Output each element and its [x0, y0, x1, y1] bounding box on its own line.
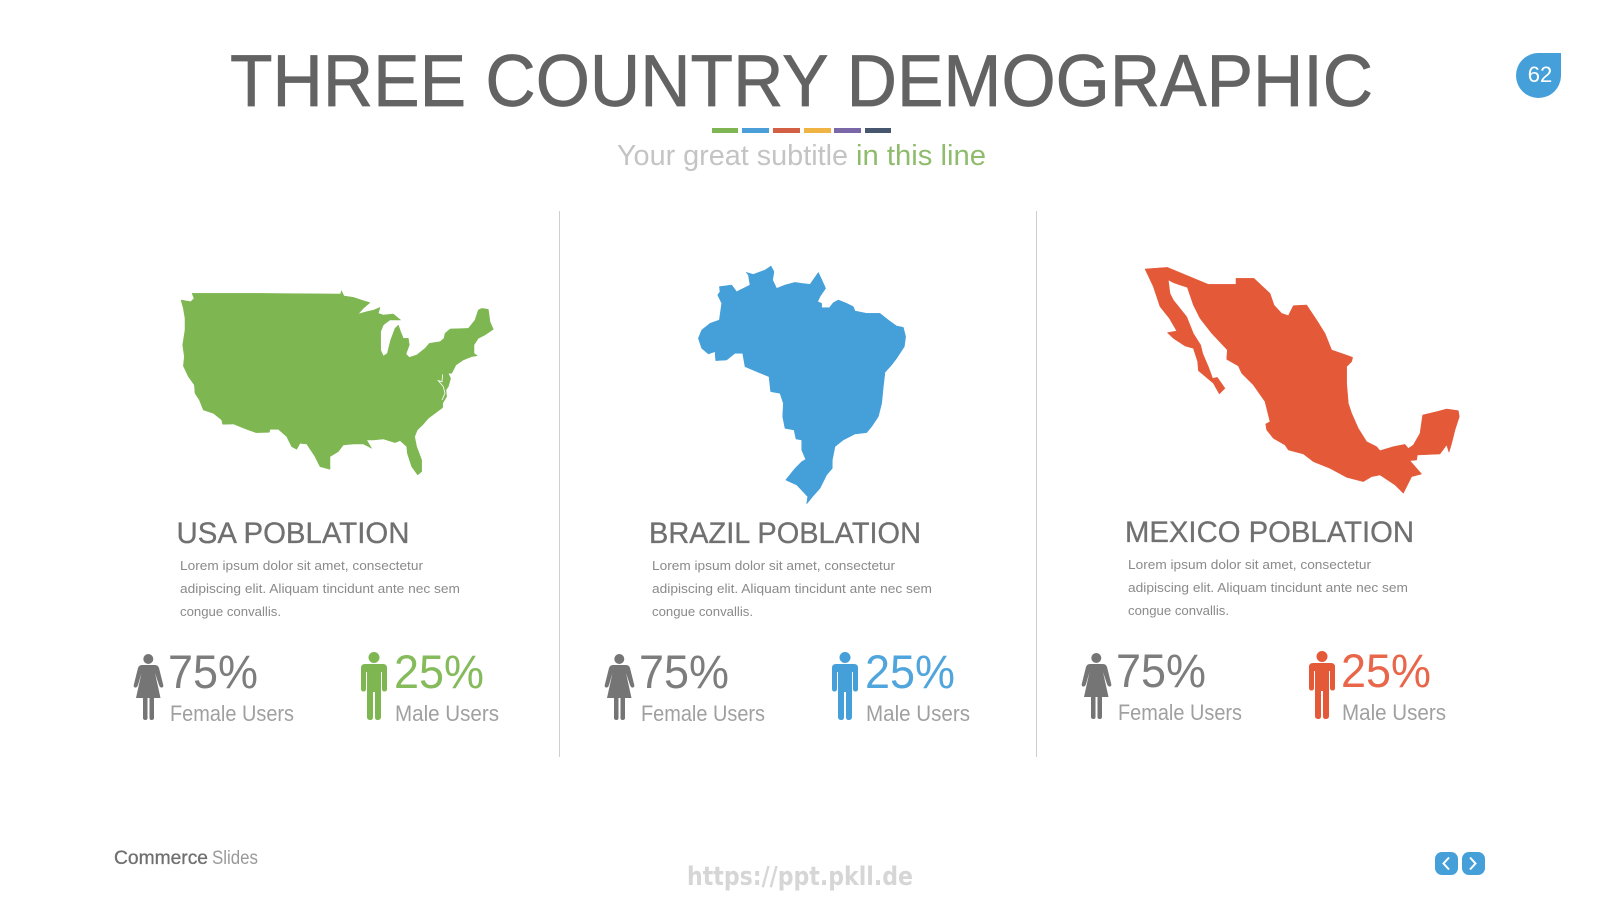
footer brand: Commerce — [114, 848, 208, 869]
body text: Brazil: Lorem ipsum dolor sit amet, consectetur — [652, 558, 896, 573]
icon: next arrow — [1462, 852, 1485, 875]
stat: male users Mexico: Male Users — [1342, 700, 1446, 725]
body text: USA: adipiscing elit. Aliquam tincidunt ante nec sem — [180, 581, 460, 596]
body text: Brazil: congue convallis. — [652, 604, 753, 619]
body text: Brazil: adipiscing elit. Aliquam tincidunt ante nec sem — [652, 581, 932, 596]
stat: female users Brazil — [605, 645, 765, 726]
body text: Brazil — [652, 558, 932, 619]
icon: male — [361, 652, 387, 720]
stat: male users USA — [361, 645, 499, 726]
stat: male users Brazil — [832, 645, 970, 726]
body text: Mexico — [1128, 557, 1408, 618]
stat: male users USA: Male Users — [395, 701, 499, 726]
stat: male users Brazil: Male Users — [866, 701, 970, 726]
title: THREE COUNTRY DEMOGRAPHIC — [230, 41, 1373, 122]
heading: Brazil: BRAZIL POBLATION — [649, 517, 921, 550]
icon: male — [832, 652, 858, 720]
navigation buttons — [1435, 852, 1485, 875]
icon: previous arrow — [1435, 852, 1458, 875]
body text: USA: Lorem ipsum dolor sit amet, consectetur — [180, 558, 424, 573]
stat: female users Brazil: Female Users — [641, 701, 765, 726]
body text: Mexico: congue convallis. — [1128, 603, 1229, 618]
panel: Mexico — [1082, 267, 1459, 725]
colour dash row — [712, 128, 891, 133]
subtitle: Your great subtitle — [617, 140, 848, 172]
stat: female users USA: 75% — [168, 645, 258, 698]
icon: female — [605, 654, 634, 720]
map: Brazil — [698, 266, 906, 504]
panel: Brazil — [605, 266, 970, 726]
heading: Mexico: MEXICO POBLATION — [1125, 516, 1414, 549]
icon: male — [1309, 651, 1335, 719]
stat: male users Brazil: 25% — [865, 645, 955, 698]
stat: male users USA: 25% — [394, 645, 484, 698]
map: USA — [181, 291, 493, 475]
icon: female — [1082, 653, 1111, 719]
page number badge — [1516, 53, 1561, 98]
stat: female users USA — [134, 645, 294, 726]
stat: female users USA: Female Users — [170, 701, 294, 726]
body text: Mexico: adipiscing elit. Aliquam tincidunt ante nec sem — [1128, 580, 1408, 595]
page number badge: 62 — [1528, 62, 1552, 87]
footer brand — [114, 848, 258, 869]
stat: female users Mexico: 75% — [1116, 644, 1206, 697]
stat: female users Mexico — [1082, 644, 1242, 725]
stat: male users Mexico: 25% — [1341, 644, 1431, 697]
stat: male users Mexico — [1309, 644, 1446, 725]
subtitle: in this line — [856, 140, 986, 172]
body text: USA — [180, 558, 460, 619]
map: Mexico — [1145, 267, 1459, 493]
stat: female users Mexico: Female Users — [1118, 700, 1242, 725]
subtitle — [617, 140, 986, 172]
stat: female users Brazil: 75% — [639, 645, 729, 698]
footer brand: Slides — [212, 848, 258, 869]
watermark url: https://ppt.pkll.de — [687, 862, 913, 892]
icon: female — [134, 654, 163, 720]
body text: USA: congue convallis. — [180, 604, 281, 619]
heading: USA: USA POBLATION — [176, 517, 410, 550]
panel: USA — [134, 291, 499, 726]
body text: Mexico: Lorem ipsum dolor sit amet, consectetur — [1128, 557, 1372, 572]
